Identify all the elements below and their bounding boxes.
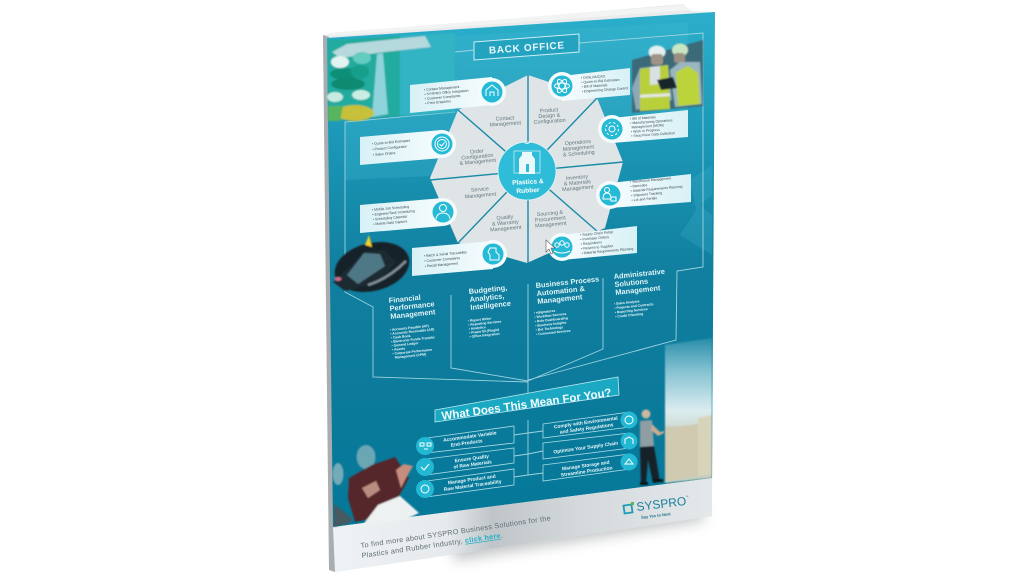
tile: quality and warranty: • Recall Management [425,261,458,268]
section: budgeting analytics intelligence [468,283,511,339]
benefit: manage storage and streamline production: Manage Storage and [562,460,610,472]
tile: order configuration: • Product Configurator [372,144,408,151]
tile: contact management: • SYSPRO Office Integration [424,89,469,96]
section: financial performance management: Financial [388,293,421,305]
section: financial performance management: Management [390,307,436,321]
section: financial performance management: Performance [389,299,435,313]
sector labels: & Scheduling [563,150,595,159]
benefit: manage product and raw material traceability: Raw Material Traceability [443,479,502,493]
sector labels: Operations [565,139,592,147]
tile: operations management: • Shop Floor Data Collection [631,131,675,138]
page background [327,12,715,527]
tile: contact management [410,77,506,113]
tile: quality and warranty: • Customer Complaints [424,256,461,263]
tablet [657,77,677,90]
section: administrative solutions management: • Credit Checking [615,312,643,319]
sector dividers [430,75,623,263]
tile: sourcing and procurement: • Purchase Orders [580,235,609,242]
benefit: optimize your supply chain [543,432,638,459]
section: financial performance management: • Accounts Payable (AP) [390,324,429,332]
booklet shadow [450,505,705,560]
photo: two workers in hard hats [632,40,703,113]
tile: product design and configuration: • Quote-to-Bid Estimates [581,78,620,84]
section: budgeting analytics intelligence: Budgeting, [468,283,508,296]
sector labels: Quality [496,214,514,222]
tile: contact management: • Price Enquiries [425,99,451,105]
tile: inventory and materials: • Shipment Tracking [631,191,662,198]
section: financial performance management: • General Ledger [391,341,419,348]
section: administrative solutions management: Administrative [613,267,665,281]
center hub: plastics and rubber [498,141,556,200]
sector labels: Management [464,192,497,200]
section: financial performance management: • Cash Book [391,334,411,340]
section: administrative solutions management [613,267,667,319]
tile: service management [360,198,457,233]
tile: operations management: Management (MOM) [630,123,664,130]
sector labels: Inventory [566,174,589,182]
logo: syspro: ™ [685,495,689,499]
section: administrative solutions management: • Reporting Services [615,307,648,315]
tile: service management: • Engineer/Task Scheduling [372,209,415,217]
tile: service management: • Scheduling Calendar [373,214,408,222]
tile: sourcing and procurement: • Material Requirements Planning [581,247,634,255]
sector labels: Management [490,225,522,234]
page edges [323,4,714,572]
sector labels: Sourcing & [537,210,564,218]
connector lines [514,431,543,477]
section: business process automation: • Business Insights [535,321,567,328]
tile: order configuration [360,130,456,165]
section: business process automation: Business Process [535,274,600,290]
octagon wheel [430,75,623,263]
section: financial performance management [388,291,437,360]
banner: what does this mean for you: What Does This Mean For You? [441,387,612,423]
logo: syspro: Say Yes to Next [641,511,672,520]
footer text with link: Plastics and Rubber Industry, click here. [361,530,504,560]
sector labels: Management [489,120,522,128]
icon: mouse pointer [546,240,555,254]
frame lines [345,33,703,475]
sector labels: Management [535,221,567,230]
faint chevrons [680,165,712,255]
tile: sourcing and procurement: • Returns to Supplier [581,244,614,251]
benefit: comply with environmental and safety regulations: Comply with Environmental [554,415,619,430]
sector labels: Procurement [535,215,567,224]
tile: inventory and materials [596,174,691,209]
benefit: comply with environmental and safety regulations [543,412,638,438]
photo: plastic bottles [665,338,712,483]
section: budgeting analytics intelligence: • Reporting Services [468,320,501,327]
photo: man with tablet [640,410,664,485]
tile: sourcing and procurement: • Requisitions [581,240,602,246]
center hub: plastics and rubber: Plastics & [512,178,544,187]
section: financial performance management: • Assets [392,347,405,352]
tile: quality and warranty [412,240,507,276]
section: financial performance management: • Electronic Funds Transfer [391,335,436,344]
section: budgeting analytics intelligence: Analytics, [469,291,505,304]
section: business process automation: Management [537,292,583,306]
benefit: accommodate variable end-products: End-Products [450,438,483,449]
section: business process automation: • Workflow Services [534,312,567,319]
tile: inventory and materials: • Warehouse Management [630,176,671,184]
section: administrative solutions management: Management [615,283,661,297]
booklet [323,4,715,572]
tile: contact management: • Customer Complaints [425,94,461,101]
sector labels: Design & [538,113,561,120]
benefit: manage product and raw material traceability: Manage Product and [448,474,496,486]
benefit: optimize your supply chain: Optimize Your Supply Chain [553,440,619,456]
heading: back office [474,34,579,60]
sector labels: Management [562,144,595,153]
tile: operations management: • Manufacturing Operations [630,118,673,125]
section: financial performance management: • Corporate Performance [392,348,433,356]
bottom white band [333,478,712,572]
tile: product design and configuration: • Engineering Change Control [582,86,628,93]
section: financial performance management: Management (CPM) [395,352,426,360]
section: business process automation: • Role Dashboarding [535,316,568,324]
tile: quality and warranty: • Batch & Serial Traceability [424,250,467,258]
sector labels: Configuration [533,118,566,126]
photo: man and woman inspecting material [332,445,419,527]
tile: operations management: • Work in Progress [631,128,660,134]
sector labels: & Materials [564,179,591,188]
center hub: plastics and rubber: Rubber [516,187,540,195]
section: administrative solutions management: Solutions [614,276,649,289]
logo: syspro: SYSPRO [636,494,687,514]
sector labels [458,107,595,234]
tile: sourcing and procurement: • Supply Chain Portal [580,230,613,237]
section: business process automation: • Connected Services [536,329,571,336]
sector labels: Management [562,184,594,193]
tile: operations management [598,110,688,143]
benefit: accommodate variable end-products: Accommodate Variable [443,430,497,444]
section: budgeting analytics intelligence: • Power BI (Plugin) [469,328,499,335]
section: budgeting analytics intelligence: Intelligence [470,299,511,312]
tile: service management: • Mobile Job Scheduling [372,205,409,212]
tile: product design and configuration [548,68,630,101]
benefit: manage storage and streamline production: Streamline Production [560,465,613,479]
sector labels: & Management [459,158,497,167]
tile: order configuration: • Sales Orders [373,151,396,157]
benefit: manage storage and streamline production [543,454,638,481]
benefit: manage product and raw material traceability [416,469,514,498]
wheel sectors [430,75,623,263]
sector labels: Product [539,107,559,115]
section: budgeting analytics intelligence: • Office Integration [469,332,500,339]
logo: syspro [623,494,690,520]
tile: sourcing and procurement [548,226,637,261]
section: budgeting analytics intelligence: • Analytics [469,325,486,331]
tile: inventory and materials: • Lot and Serials [631,196,657,202]
tile: operations management: • Bill of Materials [630,115,656,121]
sector labels: Configuration [461,153,494,162]
section: business process automation: Automation & [536,284,586,298]
section: business process automation: • eSignatures [534,309,556,315]
tile: inventory and materials: • Barcodes [630,183,648,189]
heading: back office: BACK OFFICE [489,40,565,57]
section: budgeting analytics intelligence: • Report Writer [468,316,492,323]
sector labels: Service [471,186,489,194]
logo mark [623,502,634,514]
photo: plastic pellets and machine [327,33,455,121]
section: business process automation [534,274,601,336]
sector labels: Order [470,148,484,156]
sector labels: & Warranty [492,219,519,228]
tile: order configuration: • Quote-to-Bid Estimates [372,139,411,146]
section: financial performance management: • Accounts Receivable (AR) [390,327,434,336]
sector labels: Contact [495,115,515,123]
benefit: ensure quality of raw materials [416,448,514,476]
section: business process automation: • Bot Technology [535,325,563,332]
benefit: ensure quality of raw materials: of Raw Materials [453,459,492,471]
footer text with link: To find more about SYSPRO Business Solutions for the [360,513,551,550]
worker left [632,46,672,111]
tile: product design and configuration: • DXSLink/CAD [581,74,606,80]
section: administrative solutions management: • Projects and Contracts [614,302,654,310]
benefit: ensure quality of raw materials: Ensure Quality [454,454,490,464]
benefit: accommodate variable end-products [416,426,514,455]
worker right [670,44,702,107]
photo: rubber tyre product [329,235,415,299]
section: administrative solutions management: • Sales Analysis [614,299,640,306]
benefit: comply with environmental and safety regulations: and Safety Regulations [559,422,614,436]
tile: product design and configuration: • Bill of Materials [581,83,608,89]
tile: inventory and materials: • Material Requirements Planning [631,185,683,193]
tile: contact management: • Contact Management [424,85,460,92]
tile: service management: • Mobile Data Capture [373,219,408,226]
